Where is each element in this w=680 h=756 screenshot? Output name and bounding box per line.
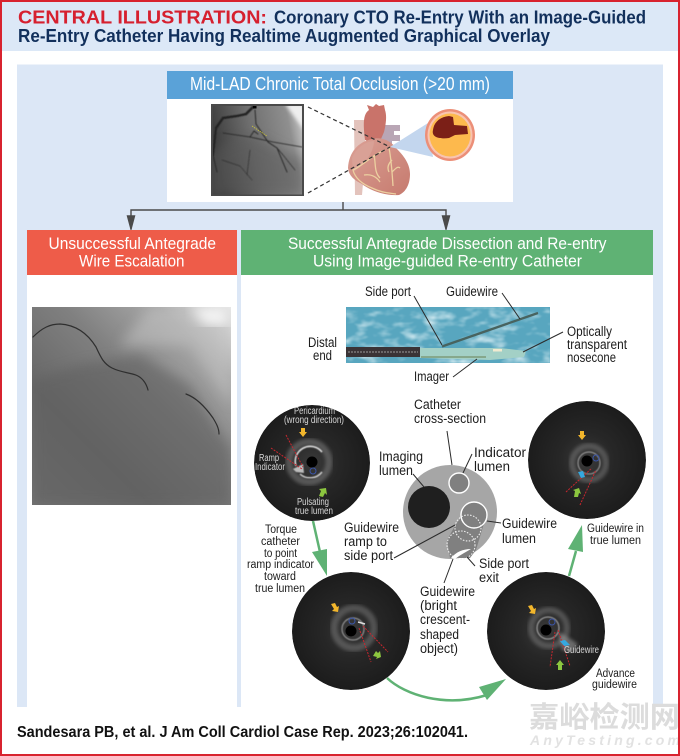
watermark: 嘉峪检测网 xyxy=(529,694,680,736)
catheter cross-section diagram: Imaging xyxy=(379,449,423,464)
ultrasound image: pericardium, ramp indicator: true lumen xyxy=(295,506,333,517)
ultrasound image: guidewire in true lumen: true lumen xyxy=(590,535,641,547)
title band: Coronary CTO Re-Entry With an Image-Guided xyxy=(274,6,646,28)
catheter photo labels xyxy=(308,284,627,384)
catheter cross-section diagram: (bright xyxy=(420,598,457,613)
left panel heading: Unsuccessful Antegrade xyxy=(48,234,216,253)
title band xyxy=(2,2,678,51)
torque instruction text: ramp indicator xyxy=(247,559,314,571)
icon: green arrow xyxy=(319,488,327,497)
indicator lumen xyxy=(449,473,469,493)
vessel cross-section inset xyxy=(390,109,475,161)
top panel: Mid-LAD chronic total occlusion xyxy=(167,71,513,202)
citation: Sandesara PB, et al. J Am Coll Cardiol Case Rep. 2023;26:102041. xyxy=(17,724,468,741)
catheter cross-section diagram: crescent- xyxy=(420,612,470,627)
panel: successful antegrade dissection and re-entry xyxy=(241,230,653,707)
ultrasound image: ramp indicator toward true lumen xyxy=(292,572,410,690)
arrow: up to guidewire in true lumen xyxy=(568,525,583,576)
right panel heading: Using Image-guided Re-entry Catheter xyxy=(313,252,582,271)
catheter cross-section diagram: shaped xyxy=(420,627,459,642)
top panel heading xyxy=(167,71,513,99)
catheter photo labels: nosecone xyxy=(567,350,616,365)
ultrasound image: guidewire advance: guidewire xyxy=(592,679,637,691)
catheter cross-section diagram: lumen xyxy=(502,531,536,546)
catheter cross-section diagram: Guidewire xyxy=(344,520,399,535)
catheter cross-section diagram: exit xyxy=(479,570,499,585)
torque instruction text: true lumen xyxy=(255,583,305,595)
dashed zoom lines xyxy=(308,107,390,193)
torque instruction text: toward xyxy=(264,571,296,583)
icon: yellow arrow xyxy=(299,428,307,437)
catheter cross-section diagram: lumen xyxy=(379,463,413,478)
catheter photo labels: Guidewire xyxy=(446,284,498,299)
catheter photo labels: transparent xyxy=(567,337,627,352)
catheter photo labels: Distal xyxy=(308,335,337,350)
torque instruction text: catheter xyxy=(261,536,300,548)
fluoroscopy image with guidewire xyxy=(32,307,231,505)
ultrasound image: guidewire advance xyxy=(487,572,637,691)
ultrasound image: pericardium, ramp indicator: Pericardium xyxy=(294,406,335,417)
catheter cross-section diagram: Catheter xyxy=(414,397,461,412)
catheter cross-section diagram: Indicator xyxy=(474,445,527,460)
icon: yellow arrow xyxy=(331,603,339,612)
icon: blue arrow xyxy=(560,640,570,646)
title band: CENTRAL ILLUSTRATION: xyxy=(18,8,267,28)
ultrasound image: guidewire in true lumen: Guidewire in xyxy=(587,523,644,535)
title band: Re-Entry Catheter Having Realtime Augmented Graphical Overlay xyxy=(18,25,551,46)
left panel heading xyxy=(27,230,237,275)
branching arrows xyxy=(128,202,450,229)
ultrasound image: pericardium, ramp indicator: Ramp xyxy=(259,453,279,464)
icon: yellow arrow xyxy=(528,605,536,614)
catheter cross-section diagram: Side port xyxy=(479,556,529,571)
icon: green arrow xyxy=(556,660,564,670)
catheter photo labels: Optically xyxy=(567,324,612,339)
curved arrow: advance step xyxy=(387,678,506,700)
left panel heading: Wire Escalation xyxy=(79,252,184,271)
catheter cross-section diagram: ramp to xyxy=(344,534,387,549)
angiogram image xyxy=(211,104,304,196)
imaging lumen xyxy=(408,486,450,528)
icon: yellow arrow xyxy=(578,431,586,440)
catheter cross-section diagram: cross-section xyxy=(414,411,486,426)
ultrasound image: guidewire advance: Advance xyxy=(596,668,635,680)
right panel heading: Successful Antegrade Dissection and Re-entry xyxy=(288,234,607,253)
ultrasound image: pericardium, ramp indicator: Indicator xyxy=(255,462,286,473)
catheter cross-section diagram: side port xyxy=(344,548,393,563)
catheter photo labels: end xyxy=(313,348,332,363)
torque instruction text xyxy=(247,524,314,595)
panel: unsuccessful antegrade wire escalation xyxy=(27,230,237,707)
icon: blue arrow xyxy=(578,471,585,478)
guidewire crescent xyxy=(451,549,471,559)
catheter cross-section diagram: object) xyxy=(420,641,458,656)
torque instruction text: Torque xyxy=(265,524,297,536)
top panel heading: Mid-LAD Chronic Total Occlusion (>20 mm) xyxy=(190,74,490,94)
right panel heading xyxy=(241,230,653,275)
icon: heart anatomy xyxy=(348,104,410,195)
catheter photo labels: Imager xyxy=(414,369,449,384)
ultrasound image: pericardium, ramp indicator xyxy=(254,405,370,521)
catheter cross-section diagram: Guidewire xyxy=(502,516,557,531)
icon: green arrow xyxy=(573,488,581,497)
catheter cross-section diagram xyxy=(344,397,557,656)
arrow: torque step xyxy=(312,521,327,576)
ultrasound image: guidewire in true lumen xyxy=(528,401,646,547)
catheter cross-section diagram: Guidewire xyxy=(420,584,475,599)
catheter photo xyxy=(346,307,550,363)
ultrasound image: guidewire advance: Guidewire xyxy=(564,645,599,656)
icon: green arrow xyxy=(373,651,381,659)
ultrasound image: pericardium, ramp indicator: (wrong direction) xyxy=(284,415,344,426)
guidewire ramp region xyxy=(447,502,487,559)
catheter cross-section diagram: lumen xyxy=(474,459,510,474)
torque instruction text: to point xyxy=(264,548,298,560)
ultrasound image: pericardium, ramp indicator: Pulsating xyxy=(297,497,329,508)
catheter photo labels: Side port xyxy=(365,284,411,299)
watermark: AnyTesting.com xyxy=(529,732,680,748)
